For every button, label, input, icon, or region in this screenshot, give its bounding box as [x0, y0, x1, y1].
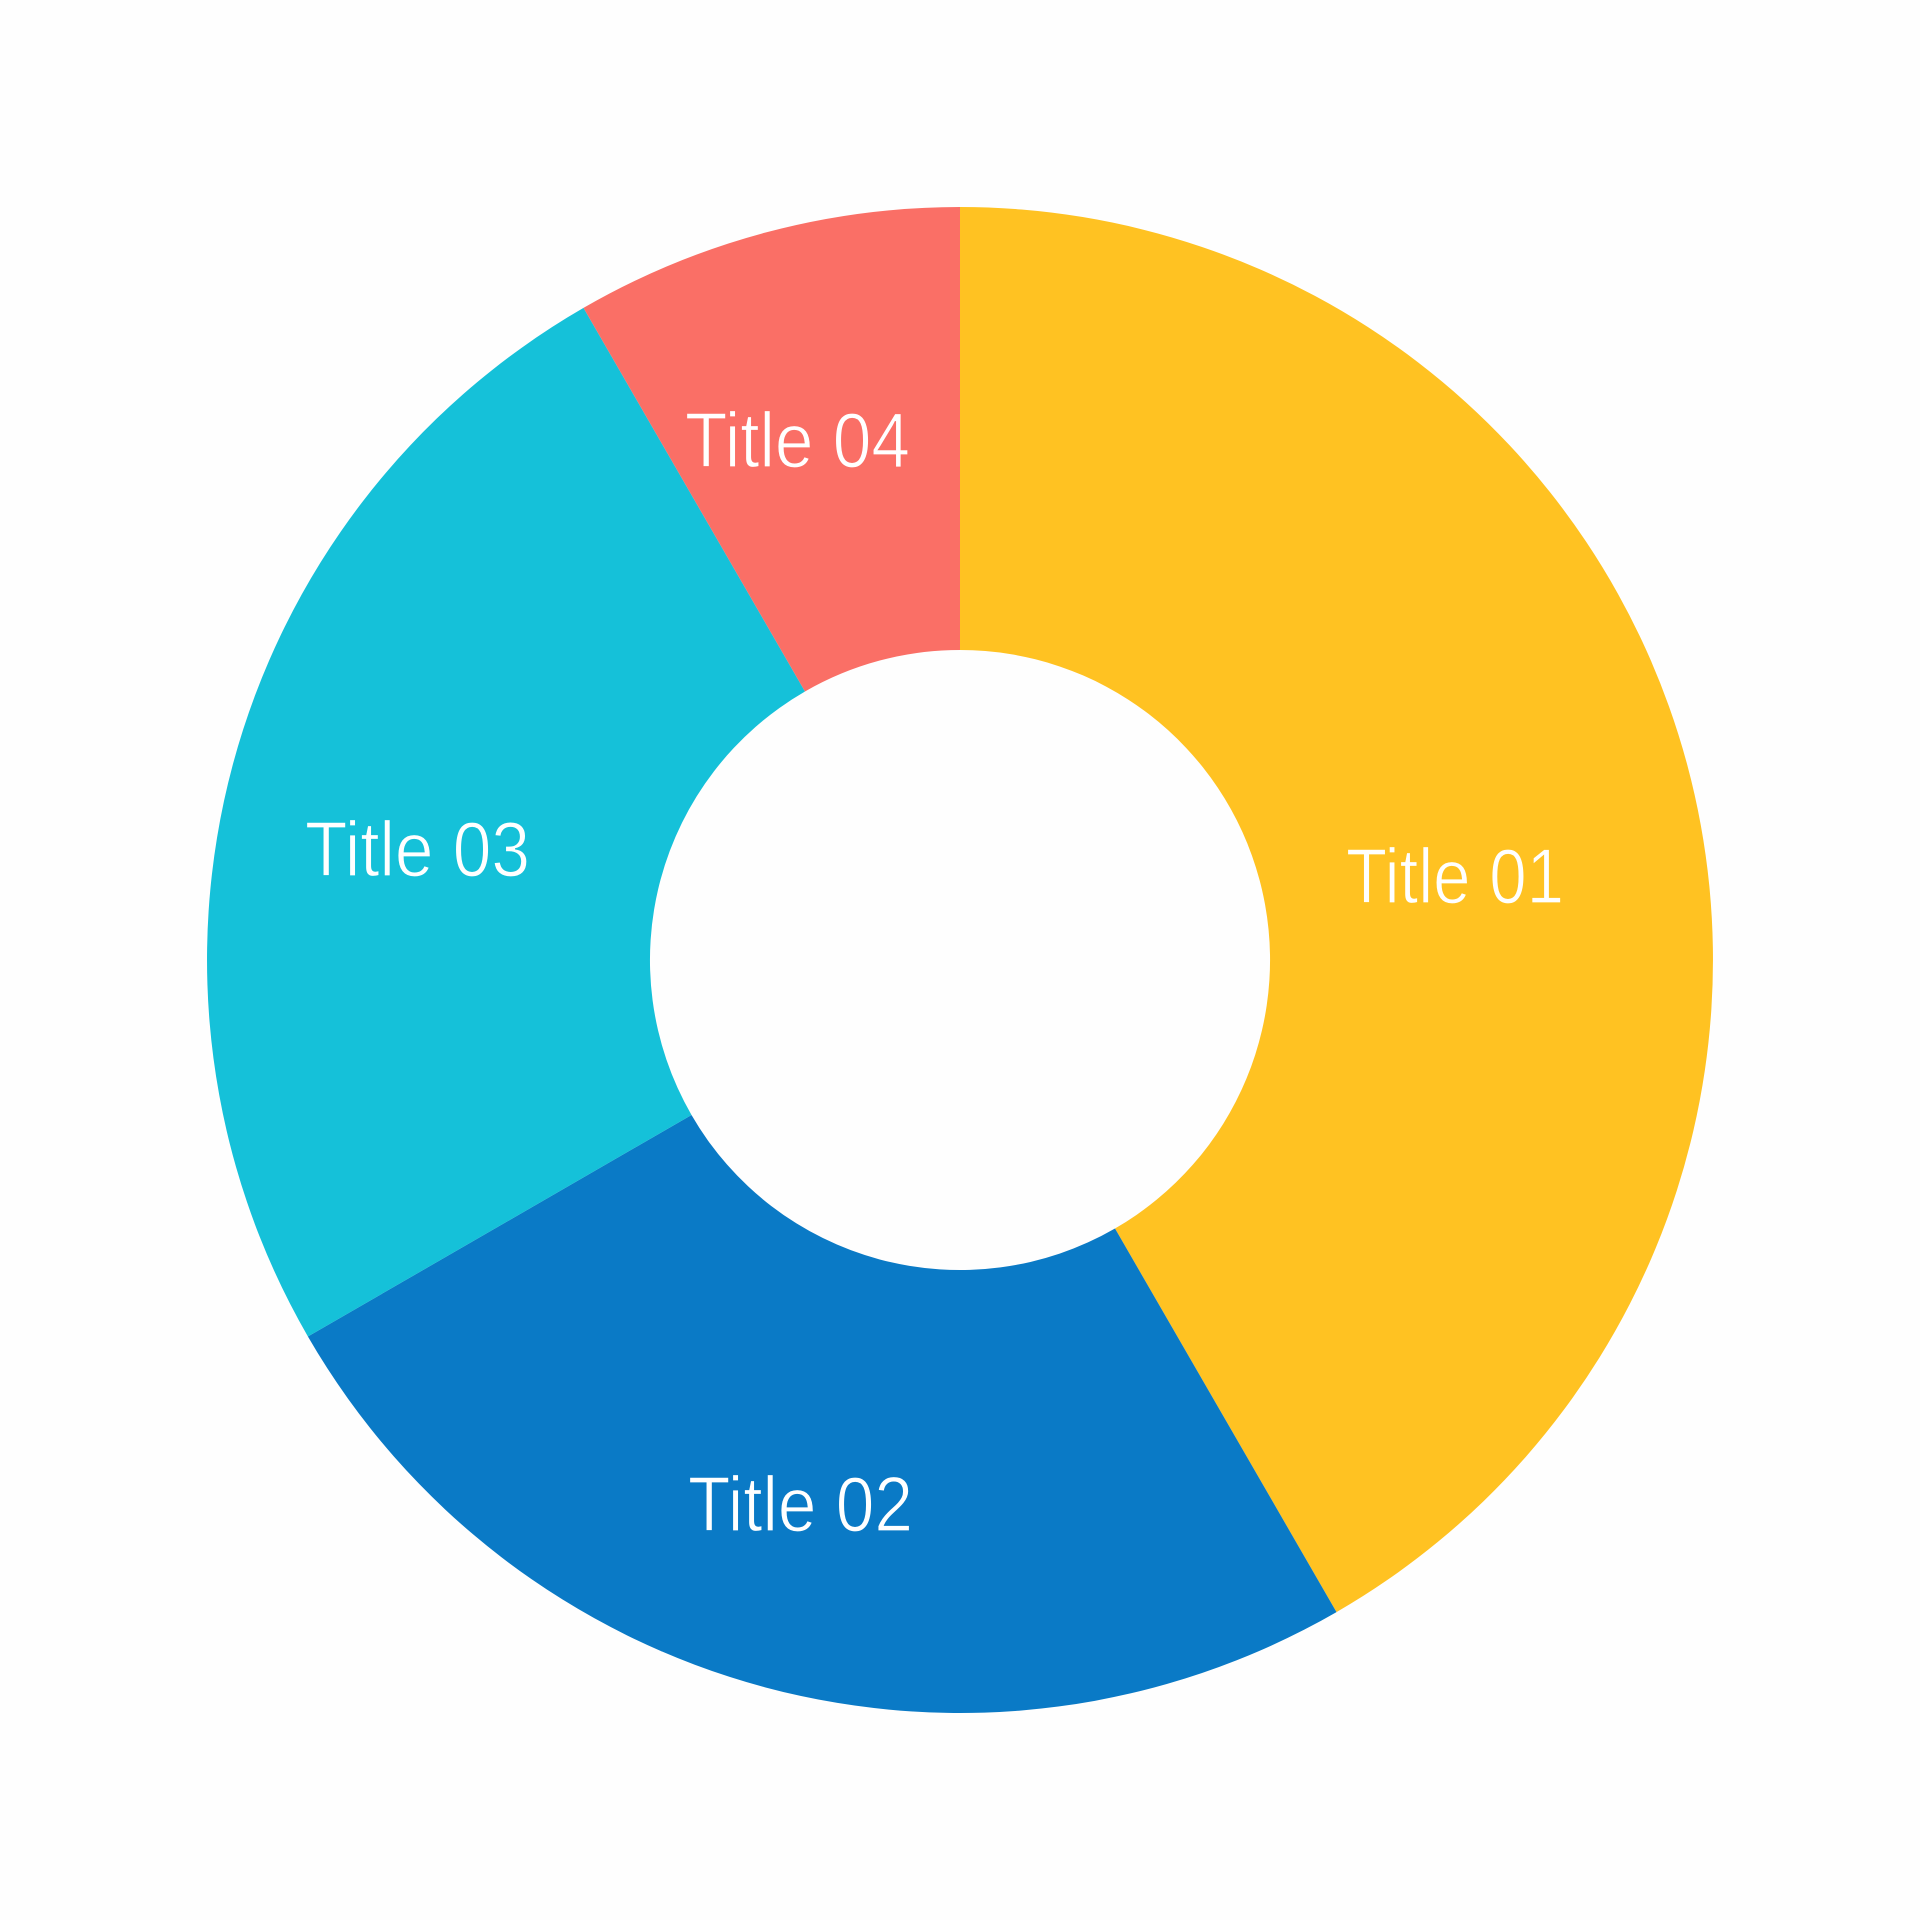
segment: Title 03	[207, 308, 805, 1336]
segment: Title 02	[308, 1115, 1336, 1713]
segment: Title 01: Title 01	[1346, 832, 1564, 920]
segment: Title 04: Title 04	[685, 396, 910, 484]
segment: Title 02: Title 02	[688, 1460, 913, 1548]
donut chart	[207, 207, 1713, 1713]
segment: Title 01	[960, 207, 1713, 1612]
segment: Title 04	[584, 207, 960, 692]
segment: Title 03: Title 03	[305, 805, 530, 893]
